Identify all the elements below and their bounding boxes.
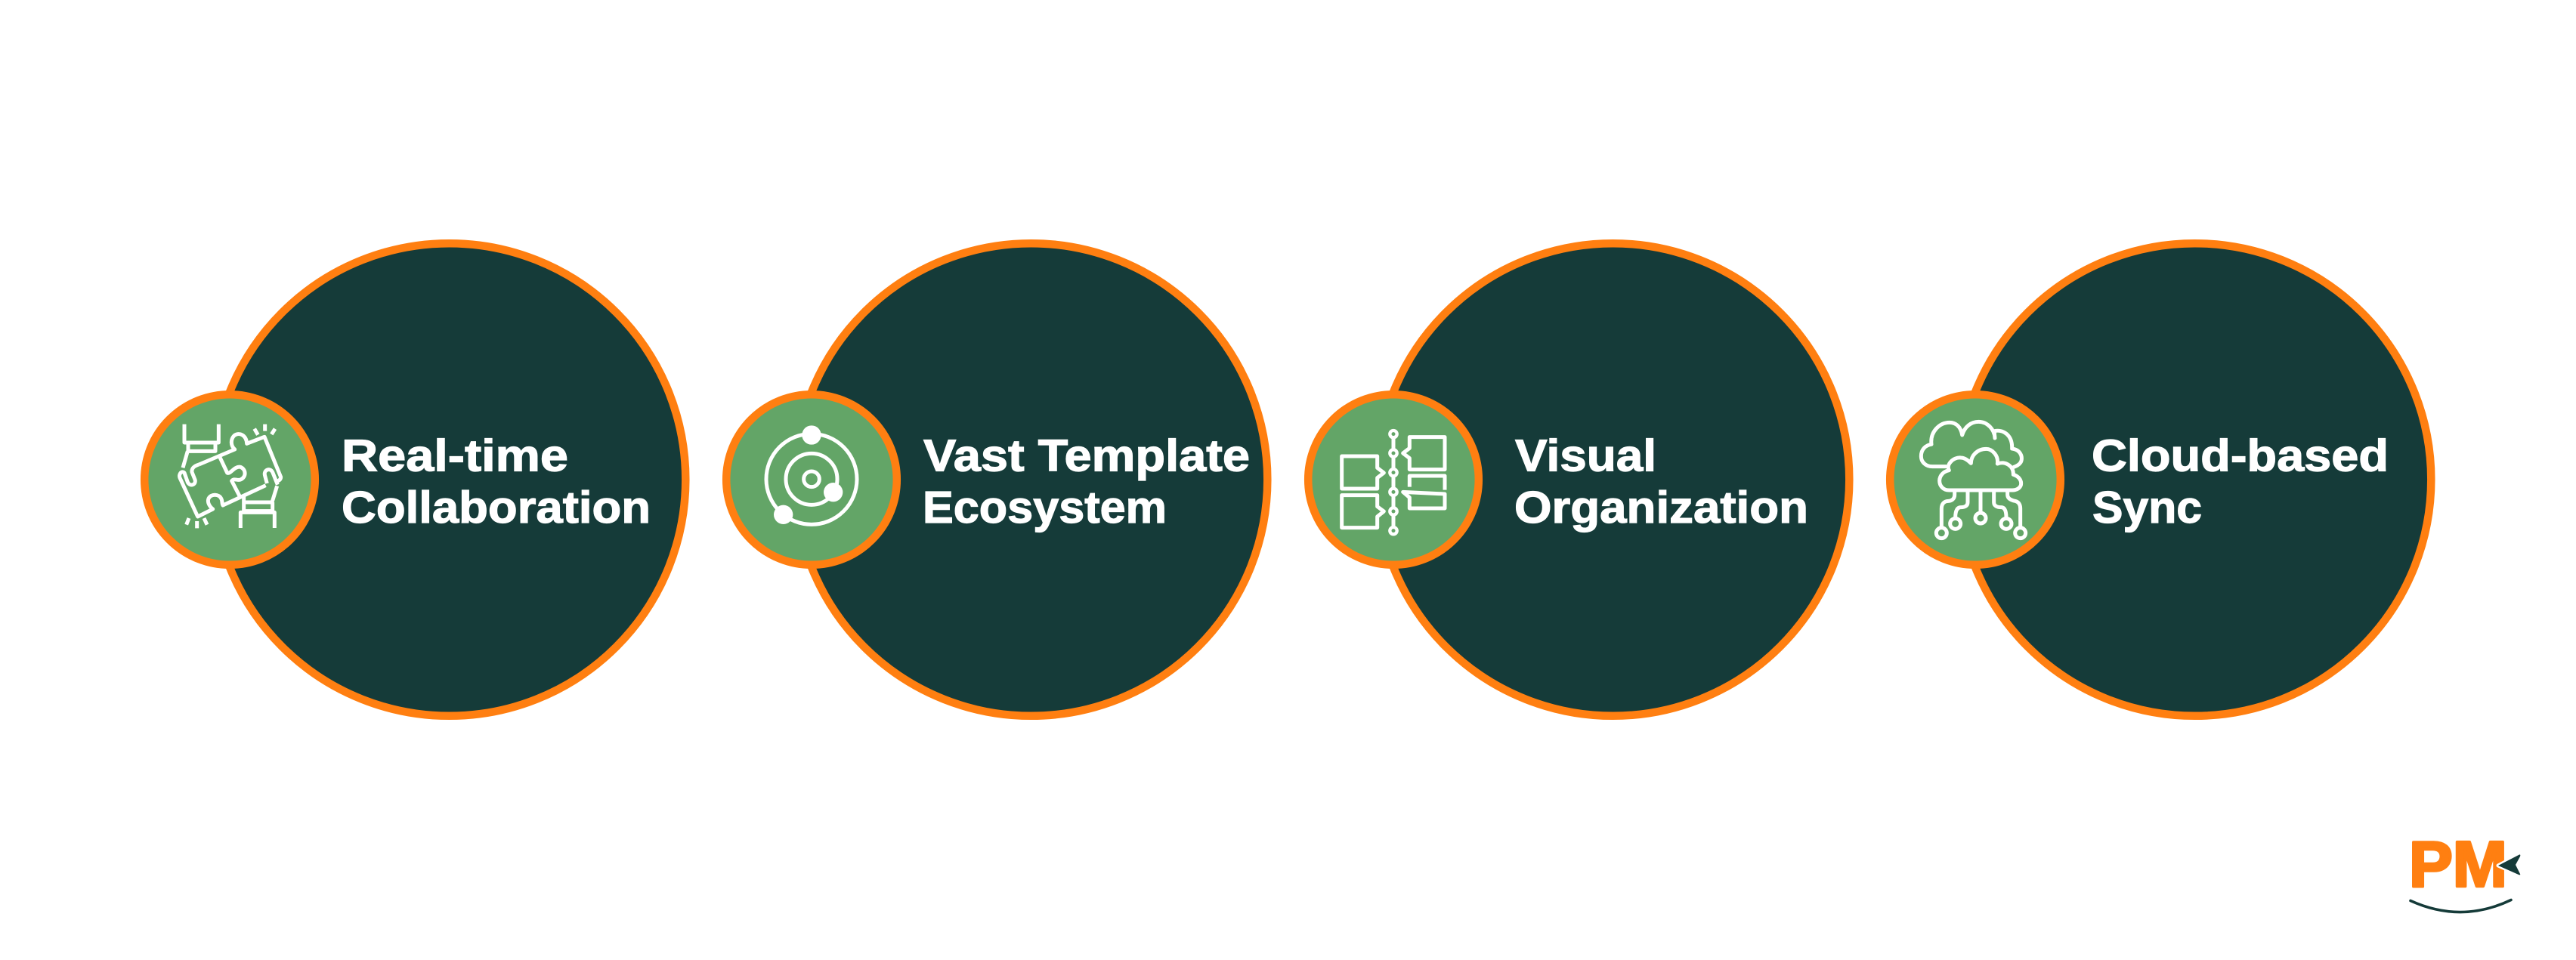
heading: Sync bbox=[2092, 483, 2202, 532]
panel: Real-time Collaboration bbox=[144, 243, 685, 716]
heading: Visual bbox=[1515, 431, 1656, 480]
large circle bbox=[1959, 243, 2431, 716]
large circle bbox=[213, 243, 685, 716]
heading bbox=[2092, 431, 2389, 532]
heading: Vast Template bbox=[923, 431, 1250, 480]
icon: cloud network bbox=[1921, 421, 2026, 539]
heading: Cloud-based bbox=[2092, 431, 2389, 480]
small icon circle bbox=[1308, 394, 1479, 565]
heading: Ecosystem bbox=[923, 483, 1167, 532]
panel: Cloud-based Sync bbox=[1890, 243, 2431, 716]
icon: hands joining puzzle pieces bbox=[180, 424, 281, 528]
small icon circle bbox=[144, 394, 315, 565]
panel: Visual Organization bbox=[1308, 243, 1849, 716]
icon: orbits bbox=[766, 425, 857, 524]
panel: Vast Template Ecosystem bbox=[726, 243, 1267, 716]
large circle bbox=[1377, 243, 1849, 716]
logo: PM: PM bbox=[2409, 829, 2507, 900]
logo arrow bbox=[2498, 854, 2520, 875]
heading: Real-time bbox=[342, 431, 568, 480]
small icon circle bbox=[726, 394, 897, 565]
heading: Organization bbox=[1514, 483, 1808, 532]
heading bbox=[1514, 431, 1808, 532]
heading bbox=[342, 431, 651, 532]
logo smile bbox=[2411, 900, 2511, 912]
large circle bbox=[795, 243, 1267, 716]
heading bbox=[923, 431, 1250, 532]
icon: timeline with boxes bbox=[1342, 431, 1445, 534]
heading: Collaboration bbox=[342, 483, 651, 532]
small icon circle bbox=[1890, 394, 2061, 565]
